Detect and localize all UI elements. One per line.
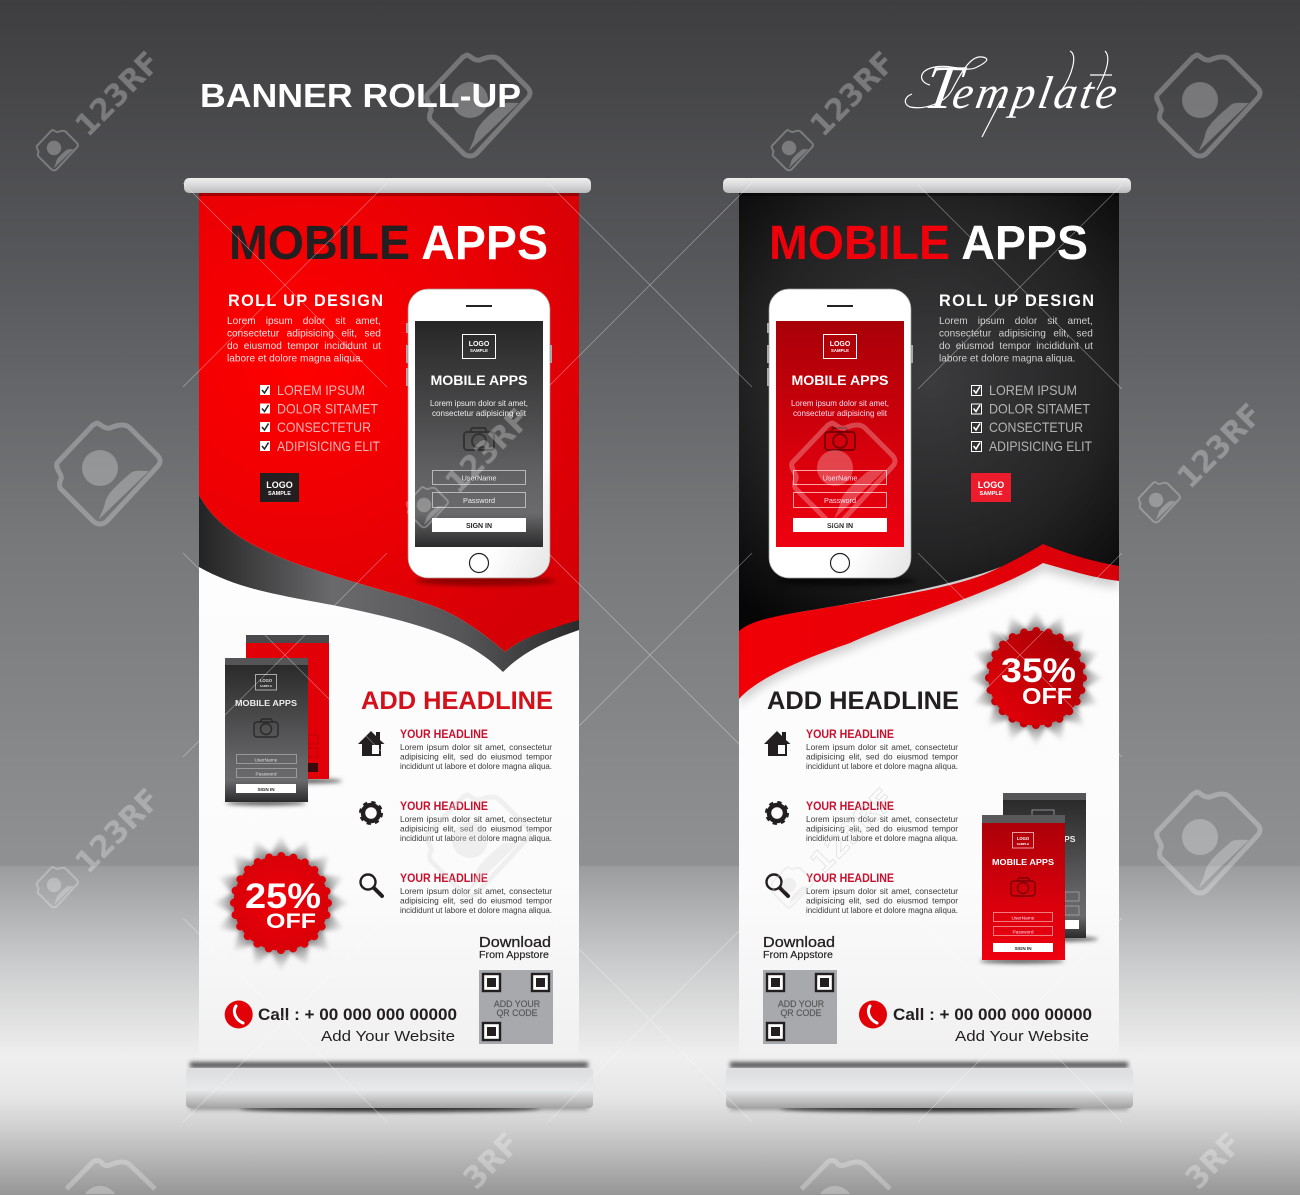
- screen logo: [824, 334, 856, 358]
- watermark partial egg marks at the bottom edge: [66, 1161, 890, 1194]
- left checklist: LOREM IPSUM: [277, 382, 365, 398]
- right front screen: LOGO: [1017, 836, 1030, 841]
- right front screen: UserName: [1012, 916, 1035, 922]
- screen logo: LOGO: [469, 341, 490, 348]
- feature 1 text: adipisicing elit, sed do eiusmod tempor: [806, 752, 958, 762]
- right phone mockup: [767, 289, 916, 586]
- right back screen: [1003, 793, 1086, 938]
- right checklist: ADIPISICING ELIT: [989, 438, 1092, 454]
- right front screen: [982, 815, 1065, 960]
- left front screen: [225, 658, 308, 802]
- feature 3 text: [400, 886, 552, 915]
- feature 3 text: adipisicing elit, sed do eiusmod tempor: [806, 896, 958, 906]
- right logo sample: [971, 473, 1011, 502]
- watermark diagonal lines: [183, 183, 1122, 1122]
- screen logo: [462, 334, 496, 358]
- right call number: Call : + 00 000 000 00000: [893, 1005, 1092, 1024]
- right front screen: Password: [1012, 930, 1034, 936]
- left red area: [199, 193, 579, 652]
- screen text: Lorem ipsum dolor sit amet,: [791, 399, 889, 408]
- left discount badge: 25% off: [213, 835, 349, 971]
- left checklist: ADIPISICING ELIT: [277, 438, 380, 454]
- icon: gear: [361, 803, 381, 823]
- feature 2 text: adipisicing elit, sed do eiusmod tempor: [806, 824, 958, 834]
- feature 2 text: Lorem ipsum dolor sit amet, consectetur: [806, 814, 958, 824]
- right intro paragraph: consectetur adipisicing elit, sed: [939, 328, 1093, 340]
- left checklist: DOLOR SITAMET: [277, 400, 378, 416]
- feature 3 text: [806, 886, 958, 915]
- right logo sample: SAMPLE: [980, 491, 1003, 497]
- phone shadow: [776, 576, 916, 586]
- left base: [186, 1062, 593, 1112]
- right QR code: QR CODE: [780, 1008, 822, 1018]
- watermark text marks: 123RF: [69, 782, 167, 881]
- phone speaker: [466, 305, 492, 307]
- left front screen: MOBILE APPS: [235, 698, 297, 708]
- left intro paragraph: labore et dolore magna aliqua.: [227, 354, 363, 364]
- right feature 3: [766, 873, 958, 915]
- left front screen: SAMPLE: [260, 684, 272, 688]
- feature 2 text: incididunt ut labore et dolore magna aliqua.: [400, 833, 552, 843]
- feature 3 text: adipisicing elit, sed do eiusmod tempor: [400, 896, 552, 906]
- right banner: artwork: [739, 193, 1119, 706]
- watermark faint egg on paper: [427, 795, 813, 907]
- left discount badge: 25% off: 25%: [245, 877, 321, 916]
- screen logo: SAMPLE: [831, 348, 849, 353]
- left heading: mobile apps: MOBILE APPS: [229, 217, 548, 270]
- screen text: [791, 399, 889, 418]
- right logo sample: LOGO: [978, 480, 1004, 490]
- screen camera icon: [825, 428, 855, 450]
- left download label: [479, 934, 551, 961]
- screen password field: Password: [824, 496, 856, 505]
- left feature 1: [358, 729, 552, 771]
- screen sign in: SIGN IN: [827, 523, 853, 530]
- right heading: mobile apps: MOBILE APPS: [769, 217, 1088, 270]
- feature 2 text: [400, 814, 552, 843]
- left call number: Call : + 00 000 000 00000: [258, 1005, 457, 1024]
- right phone call icon: [859, 1000, 887, 1028]
- screen username field: UserName: [462, 474, 496, 482]
- phone home button: [470, 554, 488, 572]
- phone side buttons: [767, 323, 913, 386]
- screen logo: SAMPLE: [470, 348, 488, 353]
- phone body: [769, 289, 911, 578]
- left phone mockup: [406, 289, 555, 586]
- left back screen: [246, 635, 329, 779]
- right base: [726, 1062, 1133, 1112]
- right QR code: ADD YOUR: [778, 999, 824, 1009]
- screen username field: [432, 470, 526, 484]
- left download label: Download: [479, 934, 551, 951]
- watermark text marks: 123RF: [804, 45, 902, 144]
- icon: magnifier: [360, 874, 382, 896]
- feature 2 text: adipisicing elit, sed do eiusmod tempor: [400, 824, 552, 834]
- left intro paragraph: do eiusmod tempor incididunt ut: [227, 341, 381, 352]
- feature 2 text: incididunt ut labore et dolore magna aliqua.: [806, 833, 958, 843]
- phone speaker: [827, 305, 853, 307]
- left intro paragraph: [227, 316, 381, 364]
- feature 1 text: [400, 742, 552, 771]
- feature 2 text: [806, 814, 958, 843]
- right checklist: DOLOR SITAMET: [989, 400, 1090, 416]
- right front screen: SAMPLE: [1017, 842, 1029, 846]
- left front screen: Password: [255, 772, 277, 778]
- feature 1 text: incididunt ut labore et dolore magna aliqua.: [806, 761, 958, 771]
- left feature 3: [360, 873, 552, 915]
- background wall: [0, 0, 1300, 867]
- right intro paragraph: [939, 316, 1093, 364]
- feature 2 heading: YOUR HEADLINE: [400, 801, 488, 813]
- feature 3 text: Lorem ipsum dolor sit amet, consectetur: [806, 886, 958, 896]
- screen logo: LOGO: [830, 341, 851, 348]
- phone shadow: [415, 576, 555, 586]
- feature 1 text: adipisicing elit, sed do eiusmod tempor: [400, 752, 552, 762]
- left banner: paper: [199, 193, 579, 1062]
- right stacked screens: [980, 793, 1098, 964]
- right discount badge: 35% off: [968, 610, 1104, 746]
- left subheading: ROLL UP DESIGN: [228, 292, 383, 310]
- screen sign in: [793, 518, 887, 532]
- right heading: add headline: ADD HEADLINE: [767, 687, 959, 715]
- right intro paragraph: labore et dolore magna aliqua.: [939, 354, 1075, 364]
- left front screen: UserName: [255, 758, 278, 764]
- left discount badge: 25% off: OFF: [266, 909, 316, 933]
- left back screen shadow: [258, 778, 342, 784]
- phone body: [408, 289, 550, 578]
- left intro paragraph: consectetur adipisicing elit, sed: [227, 328, 381, 340]
- screen password field: Password: [463, 496, 495, 505]
- screen username field: [794, 470, 886, 484]
- left feature 2: [361, 801, 552, 843]
- phone screen: [415, 321, 543, 547]
- feature 2 heading: YOUR HEADLINE: [806, 801, 894, 813]
- screen text: consectetur adipisicing elit: [432, 409, 527, 418]
- screen text: consectetur adipisicing elit: [793, 409, 888, 418]
- feature 3 text: incididunt ut labore et dolore magna aliqua.: [400, 905, 552, 915]
- right roller shadow: [739, 193, 1119, 196]
- icon: gear: [767, 803, 787, 823]
- right feature 2: [767, 801, 958, 843]
- watermark text marks: 3RF: [1179, 1127, 1249, 1195]
- background floor: [0, 866, 1300, 1195]
- watermark text marks: 123RF: [69, 45, 167, 144]
- feature 1 heading: YOUR HEADLINE: [400, 729, 488, 741]
- left front screen: LOGO: [260, 678, 273, 683]
- right discount badge: 35% off: 35%: [1001, 652, 1076, 690]
- left heading: add headline: ADD HEADLINE: [361, 687, 553, 715]
- left QR code: QR CODE: [496, 1008, 538, 1018]
- phone side buttons: [406, 323, 552, 386]
- left logo sample: LOGO: [266, 480, 293, 490]
- feature 1 text: Lorem ipsum dolor sit amet, consectetur: [400, 742, 552, 752]
- feature 3 text: incididunt ut labore et dolore magna aliqua.: [806, 905, 958, 915]
- left banner: artwork: [199, 193, 579, 672]
- feature 1 text: [806, 742, 958, 771]
- right front screen shadow: [980, 958, 1064, 964]
- right black area: [739, 193, 1119, 635]
- right back screen shadow: [1014, 936, 1098, 942]
- right banner: [723, 178, 1133, 1112]
- feature 3 heading: YOUR HEADLINE: [400, 873, 488, 885]
- watermark text marks: 3RF: [457, 1127, 527, 1195]
- right checklist: CONSECTETUR: [989, 419, 1083, 435]
- left logo sample: [260, 473, 299, 502]
- left checklist: [260, 382, 380, 454]
- screen camera icon: [464, 428, 494, 450]
- right website: Add Your Website: [955, 1028, 1089, 1045]
- left QR code: [479, 970, 553, 1044]
- right back screen: PS: [1064, 834, 1076, 844]
- right roller top: [723, 178, 1131, 193]
- right download label: Download: [763, 934, 835, 951]
- right soft shadow under ribbon: [739, 560, 1119, 706]
- screen heading: MOBILE APPS: [792, 373, 889, 388]
- feature 1 text: Lorem ipsum dolor sit amet, consectetur: [806, 742, 958, 752]
- right banner: paper: [739, 193, 1119, 1062]
- left download label: From Appstore: [479, 950, 549, 961]
- screen heading: MOBILE APPS: [430, 373, 528, 388]
- watermark text marks: 123RF: [439, 402, 537, 501]
- right subheading: ROLL UP DESIGN: [939, 292, 1094, 310]
- phone screen: [776, 321, 904, 547]
- screen sign in: [432, 518, 526, 532]
- left front screen shadow: [226, 800, 306, 806]
- title: template script: Template: [920, 52, 1127, 122]
- icon: magnifier: [766, 874, 788, 896]
- screen password field: [432, 492, 526, 508]
- icon: house: [358, 731, 384, 756]
- left dark wave: [199, 495, 579, 672]
- right front screen: SIGN IN: [1014, 946, 1032, 951]
- left roller shadow: [199, 193, 579, 196]
- feature 3 text: Lorem ipsum dolor sit amet, consectetur: [400, 886, 552, 896]
- left QR code: ADD YOUR: [494, 999, 540, 1009]
- left website: Add Your Website: [321, 1028, 455, 1045]
- left stacked screens: [225, 635, 342, 806]
- screen text: Lorem ipsum dolor sit amet,: [430, 399, 528, 408]
- right download label: [763, 934, 835, 961]
- screen text: [430, 399, 528, 418]
- left phone call icon: [225, 1000, 253, 1028]
- right intro paragraph: do eiusmod tempor incididunt ut: [939, 341, 1093, 352]
- feature 3 heading: YOUR HEADLINE: [806, 873, 894, 885]
- watermark egg icons: [37, 55, 1260, 907]
- right discount badge: 35% off: OFF: [1022, 683, 1072, 709]
- right QR code: [763, 970, 837, 1044]
- screen sign in: SIGN IN: [466, 523, 492, 530]
- left banner: [184, 178, 593, 1112]
- right checklist: LOREM IPSUM: [989, 382, 1077, 398]
- right red ribbon: [739, 544, 1119, 699]
- screen username field: UserName: [823, 474, 857, 482]
- right intro paragraph: Lorem ipsum dolor sit amet,: [939, 316, 1093, 327]
- feature 1 text: incididunt ut labore et dolore magna aliqua.: [400, 761, 552, 771]
- right download label: From Appstore: [763, 950, 833, 961]
- title: banner roll-up: BANNER ROLL-UP: [200, 77, 521, 114]
- left intro paragraph: Lorem ipsum dolor sit amet,: [227, 316, 381, 327]
- right front screen: MOBILE APPS: [992, 857, 1054, 867]
- left checklist: CONSECTETUR: [277, 419, 371, 435]
- watermark faint text on paper: 123RF: [804, 782, 902, 881]
- icon: house: [764, 731, 790, 756]
- left logo sample: SAMPLE: [268, 491, 291, 497]
- feature 2 text: Lorem ipsum dolor sit amet, consectetur: [400, 814, 552, 824]
- phone home button: [830, 554, 850, 572]
- right checklist: [972, 382, 1092, 454]
- screen password field: [794, 492, 886, 508]
- feature 1 heading: YOUR HEADLINE: [806, 729, 894, 741]
- left roller top: [184, 178, 591, 193]
- left front screen: SIGN IN: [257, 787, 275, 792]
- watermark text marks: 123RF: [1171, 397, 1269, 496]
- right feature 1: [764, 729, 958, 771]
